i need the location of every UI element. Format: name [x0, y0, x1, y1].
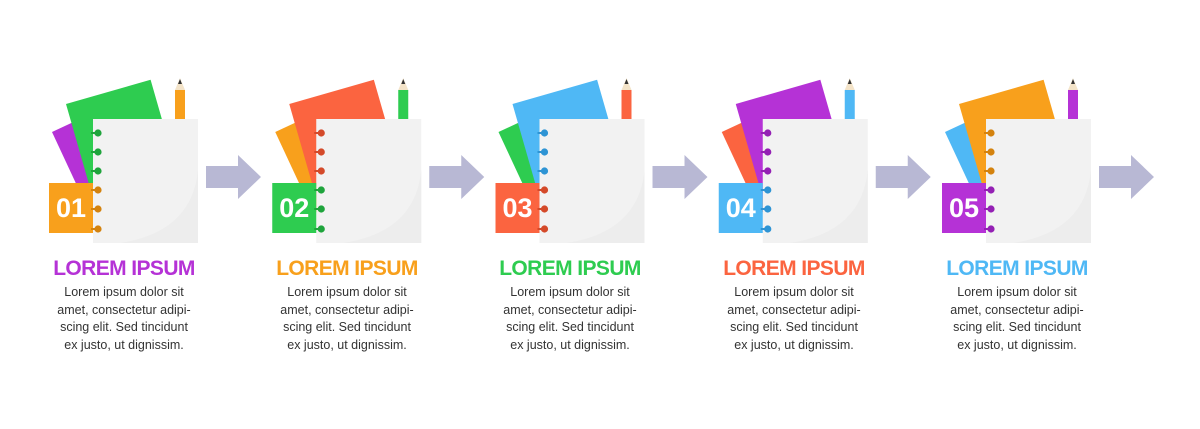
text 3: ex justo, ut dignissim. [510, 338, 630, 352]
text 3: amet, consectetur adipi- [503, 302, 637, 316]
text 4: amet, consectetur adipi- [727, 302, 861, 316]
text 3: scing elit. Sed tincidunt [506, 320, 634, 334]
text 2 [280, 285, 414, 352]
text 4: ex justo, ut dignissim. [734, 338, 854, 352]
step 4: 04 [726, 193, 756, 223]
text 5: amet, consectetur adipi- [950, 302, 1084, 316]
step 1: 01 [56, 193, 86, 223]
text 5: ex justo, ut dignissim. [957, 338, 1077, 352]
text 1: Lorem ipsum dolor sit [64, 285, 184, 299]
text 3: Lorem ipsum dolor sit [510, 285, 630, 299]
text 3 [503, 285, 637, 352]
heading 5: LOREM IPSUM [946, 257, 1088, 280]
text 2: scing elit. Sed tincidunt [283, 320, 411, 334]
text 2: Lorem ipsum dolor sit [287, 285, 407, 299]
step 2 [272, 78, 484, 243]
step 5: 05 [949, 193, 979, 223]
text 5: scing elit. Sed tincidunt [953, 320, 1081, 334]
step 3: 03 [502, 193, 533, 223]
text 1: amet, consectetur adipi- [57, 302, 191, 316]
text 5 [950, 285, 1084, 352]
text 1 [57, 285, 191, 352]
heading 2: LOREM IPSUM [276, 257, 418, 280]
heading 1: LOREM IPSUM [53, 257, 195, 280]
text 4: scing elit. Sed tincidunt [730, 320, 858, 334]
text 4: Lorem ipsum dolor sit [734, 285, 854, 299]
step 4 [719, 78, 931, 243]
text 2: ex justo, ut dignissim. [287, 338, 407, 352]
step 3 [496, 78, 708, 243]
heading 3: LOREM IPSUM [499, 257, 641, 280]
step 1 [49, 78, 261, 243]
step 5 [942, 78, 1154, 243]
step 2: 02 [279, 193, 309, 223]
text 1: scing elit. Sed tincidunt [60, 320, 188, 334]
text 4 [727, 285, 861, 352]
text 2: amet, consectetur adipi- [280, 302, 414, 316]
text 5: Lorem ipsum dolor sit [957, 285, 1077, 299]
text 1: ex justo, ut dignissim. [64, 338, 184, 352]
heading 4: LOREM IPSUM [723, 257, 865, 280]
